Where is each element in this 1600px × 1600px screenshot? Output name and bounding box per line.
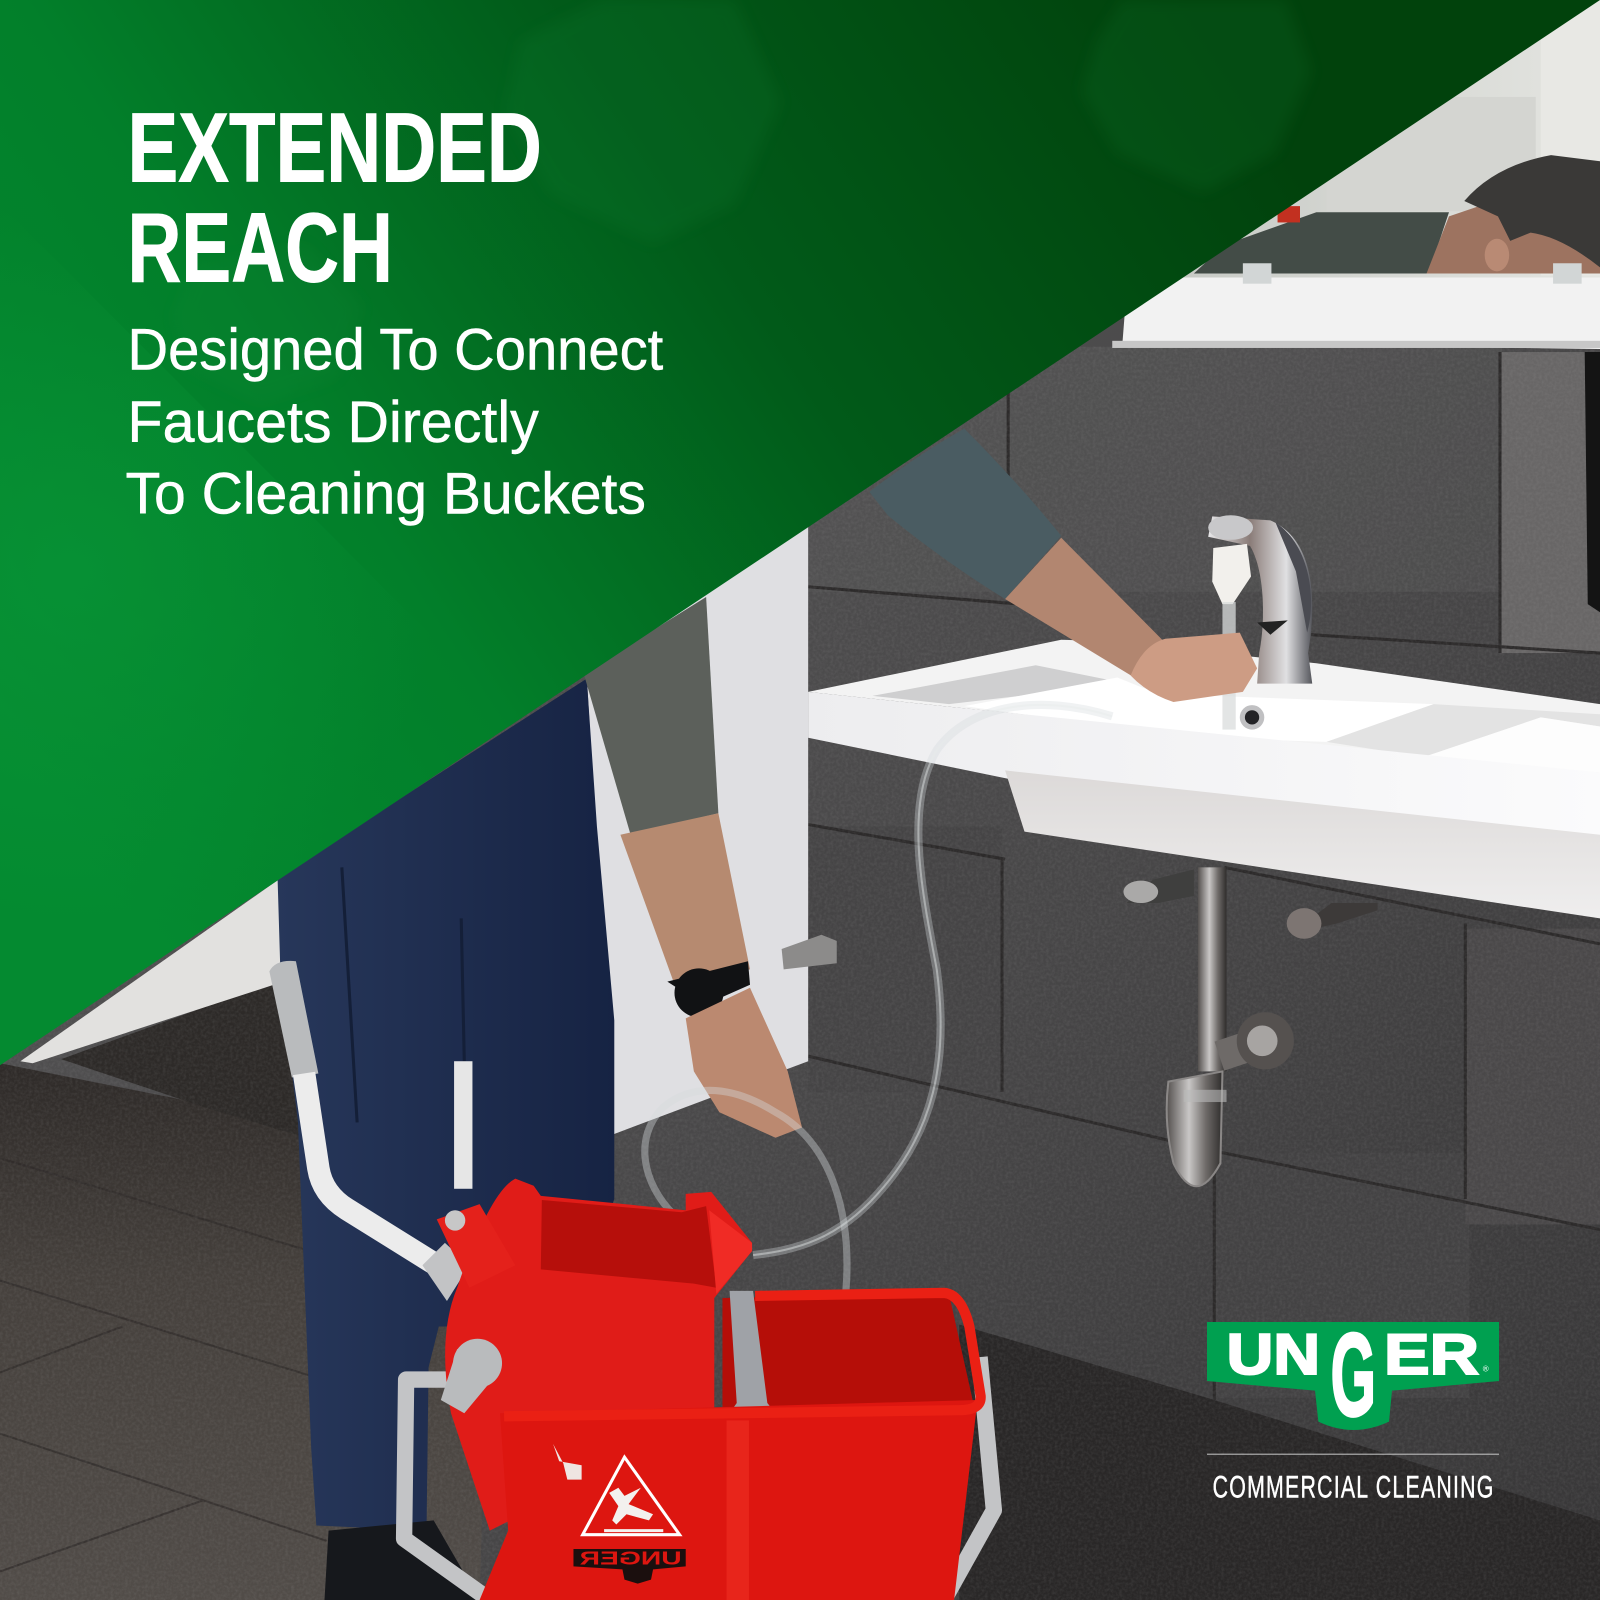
wall tiles [808,347,1600,1400]
sink [808,640,1600,918]
logo badge [1207,1322,1499,1430]
bucket: warning triangle [553,1444,680,1535]
bucket: mirrored logo [573,1547,686,1584]
person: teal sleeve upper arm [869,429,1061,599]
bucket: divider [730,1291,776,1413]
bucket: wringer [437,1179,752,1531]
logo tagline: COMMERCIAL CLEANING [1213,1469,1493,1504]
person: blue trousers [278,679,614,1531]
person: lower arm [620,813,750,982]
logo wordmark: UN [1227,1323,1320,1387]
mirror shelf [1122,278,1600,349]
subtitle [126,317,663,526]
person: upper hand [1131,633,1257,702]
door hinge [782,935,837,969]
wall and floor texture [0,347,1600,1600]
bucket: front body [480,1400,978,1600]
title: EXTENDED [128,93,542,203]
partition strip between legs [454,1061,472,1189]
bucket: grey carry handle [404,1357,994,1600]
white partition left [20,867,296,1063]
subtitle: To Cleaning Buckets [126,461,646,526]
lens flares [173,0,1311,403]
logo wordmark: ® [1483,1364,1489,1373]
title [128,93,542,303]
pipes under sink [1123,867,1378,1186]
white door panel [587,510,808,1135]
reflected man in mirror [1194,155,1600,273]
floor: left [0,1063,490,1600]
floor: lower-left wall base [61,980,306,1138]
person: watch [667,961,750,1017]
person: lower hand [686,988,802,1138]
logo: Unger Commercial Cleaning [1207,1308,1499,1504]
mirror [1122,0,1600,312]
floor: right [959,1324,1600,1600]
logo rule [1207,1454,1499,1455]
title: REACH [128,193,393,303]
subtitle: Designed To Connect [128,317,663,382]
mop handle [269,961,469,1301]
person: upper arm [1005,538,1163,677]
subtitle: Faucets Directly [128,390,539,455]
logo wordmark [1227,1308,1489,1441]
person: grey sleeve lower arm [584,597,718,835]
faucet [1208,515,1312,730]
logo wordmark: ER [1384,1323,1479,1387]
clear hose [645,705,1112,1291]
logo wordmark: G [1331,1308,1376,1441]
sink drain [1240,705,1264,730]
bucket: mirrored logo: UNGER [580,1547,682,1568]
wall dispenser [1585,352,1600,612]
person: shoe [324,1520,480,1600]
bucket: open compartment [722,1294,974,1420]
green diagonal banner [0,0,1600,1065]
bucket: lever [441,1339,502,1413]
